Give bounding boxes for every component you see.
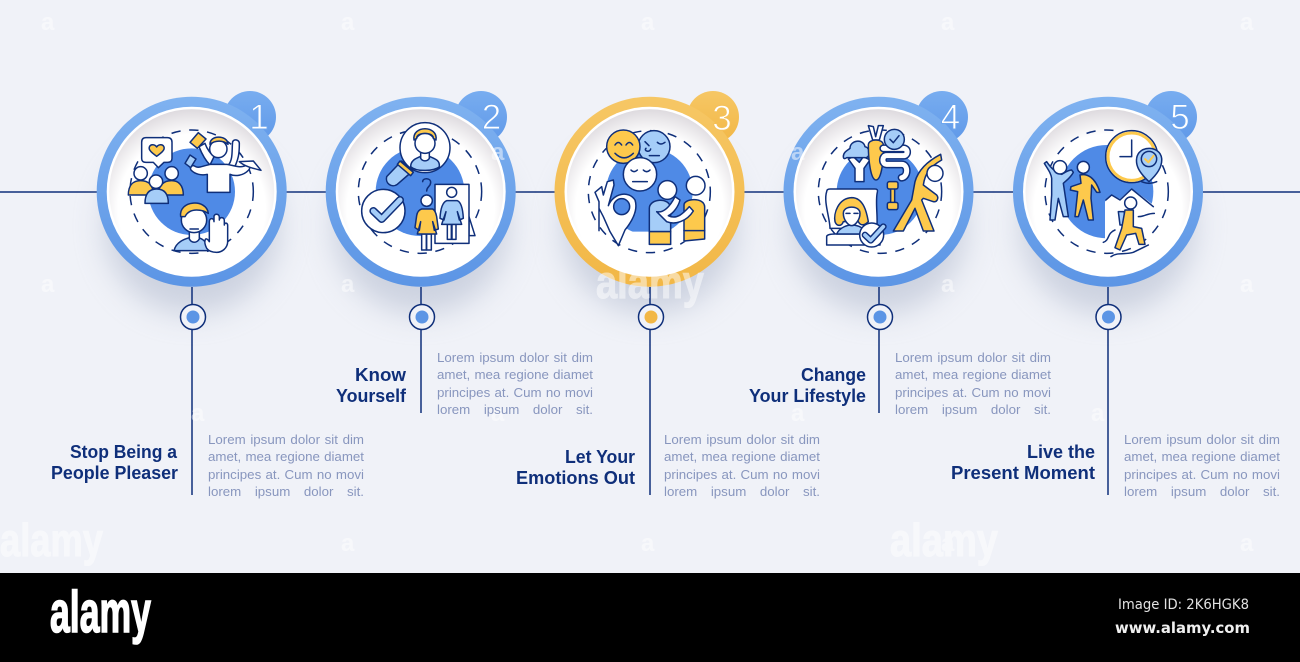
icon: emotions xyxy=(588,130,710,253)
title: step 5 xyxy=(951,442,1095,483)
icon: present moment xyxy=(1044,130,1168,257)
badge 2 xyxy=(455,91,507,143)
shadow xyxy=(791,138,967,314)
icon: lifestyle xyxy=(818,126,943,253)
watermarks: a xyxy=(341,271,355,298)
title: step 5: Present Moment xyxy=(951,463,1095,483)
watermarks: a xyxy=(191,400,205,427)
title: step 5: Live the xyxy=(1027,442,1095,462)
watermarks: a xyxy=(341,9,355,36)
badge 5 xyxy=(1145,91,1197,143)
text block: step 5: amet, mea regione diamet xyxy=(1124,449,1280,464)
text block: step 5: lorem ipsum dolor sit. xyxy=(1124,484,1280,499)
title: step 3 xyxy=(516,447,635,488)
text block: step 3: Lorem ipsum dolor sit dim xyxy=(664,432,820,447)
badge 4 xyxy=(916,91,968,143)
text block: step 5: principes at. Cum no movi xyxy=(1124,467,1280,482)
connector and dot xyxy=(1096,287,1121,495)
number 4: 4 xyxy=(941,98,960,137)
footer band xyxy=(0,573,1300,662)
number 5: 5 xyxy=(1170,98,1190,137)
inner disc xyxy=(794,107,964,277)
watermarks: a xyxy=(941,9,955,36)
text block: step 2: principes at. Cum no movi xyxy=(437,385,593,400)
connector and dot xyxy=(410,287,434,413)
badge 1 xyxy=(224,91,276,143)
ring xyxy=(97,97,287,287)
watermarks: a xyxy=(1240,271,1254,298)
watermarks: a xyxy=(941,271,955,298)
shadow xyxy=(333,138,509,314)
ring xyxy=(554,97,744,287)
title: step 1: Stop Being a xyxy=(70,442,178,462)
shadow xyxy=(562,138,738,314)
text block: step 2: lorem ipsum dolor sit. xyxy=(437,402,593,417)
title: step 2: Know xyxy=(355,365,407,385)
text block: step 3 xyxy=(664,432,820,499)
icon: people pleaser xyxy=(128,130,261,253)
number 3: 3 xyxy=(712,99,732,138)
alamy logo: alamy xyxy=(50,580,151,645)
watermarks: alamy xyxy=(0,514,103,566)
title: step 4 xyxy=(749,365,866,406)
watermarks: a xyxy=(641,530,655,557)
badge 3 xyxy=(687,91,739,143)
inner disc xyxy=(107,107,277,277)
image id: Image ID: 2K6HGK8 xyxy=(1118,597,1249,613)
text block: step 1: principes at. Cum no movi xyxy=(208,467,364,482)
text block: step 3: amet, mea regione diamet xyxy=(664,449,820,464)
connector and dot xyxy=(868,287,892,413)
title: step 3: Emotions Out xyxy=(516,468,635,488)
watermarks: a xyxy=(941,530,955,557)
text block: step 1: Lorem ipsum dolor sit dim xyxy=(208,432,364,447)
title: step 1: People Pleaser xyxy=(51,463,178,483)
horizontal connector line xyxy=(0,191,1300,193)
connector and dot xyxy=(180,287,206,495)
step 2 marker xyxy=(326,91,516,413)
inner disc xyxy=(1023,107,1193,277)
icon: know yourself xyxy=(358,123,482,253)
watermarks: a xyxy=(641,9,655,36)
ring xyxy=(784,97,974,287)
ring xyxy=(1013,97,1203,287)
text block: step 2: Lorem ipsum dolor sit dim xyxy=(437,350,593,365)
watermarks: a xyxy=(491,139,505,166)
text block: step 5: Lorem ipsum dolor sit dim xyxy=(1124,432,1280,447)
title: step 3: Let Your xyxy=(565,447,635,467)
title: step 4: Your Lifestyle xyxy=(749,386,866,406)
watermarks: a xyxy=(1240,9,1254,36)
title: step 4: Change xyxy=(801,365,866,385)
watermarks: a xyxy=(1091,400,1105,427)
watermarks: a xyxy=(491,400,505,427)
text block: step 4: principes at. Cum no movi xyxy=(895,385,1051,400)
watermarks: a xyxy=(341,530,355,557)
text block: step 4: lorem ipsum dolor sit. xyxy=(895,402,1051,417)
website: www.alamy.com xyxy=(1115,619,1250,637)
text block: step 4: amet, mea regione diamet xyxy=(895,367,1051,382)
text block: step 2: amet, mea regione diamet xyxy=(437,367,593,382)
inner disc xyxy=(564,107,734,277)
text block: step 4: Lorem ipsum dolor sit dim xyxy=(895,350,1051,365)
watermarks: a xyxy=(41,271,55,298)
number 2: 2 xyxy=(482,98,501,137)
text block: step 5 xyxy=(1124,432,1280,499)
text block: step 2 xyxy=(437,350,593,417)
step 3 marker xyxy=(554,91,744,495)
text block: step 1: amet, mea regione diamet xyxy=(208,449,364,464)
title: step 2 xyxy=(336,365,407,406)
text block: step 3: principes at. Cum no movi xyxy=(664,467,820,482)
watermarks: a xyxy=(791,139,805,166)
text block: step 1 xyxy=(208,432,364,499)
text block: step 4 xyxy=(895,350,1051,417)
text block: step 3: lorem ipsum dolor sit. xyxy=(664,484,820,499)
shadow xyxy=(104,138,280,314)
shadow xyxy=(1020,138,1196,314)
text block: step 1: lorem ipsum dolor sit. xyxy=(208,484,364,499)
watermarks: a xyxy=(791,400,805,427)
ring xyxy=(326,97,516,287)
inner disc xyxy=(336,107,506,277)
watermarks: a xyxy=(41,9,55,36)
title: step 1 xyxy=(51,442,178,483)
connector and dot xyxy=(638,287,664,495)
watermarks: alamy xyxy=(890,514,998,566)
step 1 marker xyxy=(97,91,287,495)
step 4 marker xyxy=(784,91,974,413)
title: step 2: Yourself xyxy=(336,386,407,406)
number 1: 1 xyxy=(249,98,269,137)
watermarks: a xyxy=(1240,530,1254,557)
watermarks: alamy xyxy=(596,256,704,308)
step 5 marker xyxy=(1013,91,1203,495)
